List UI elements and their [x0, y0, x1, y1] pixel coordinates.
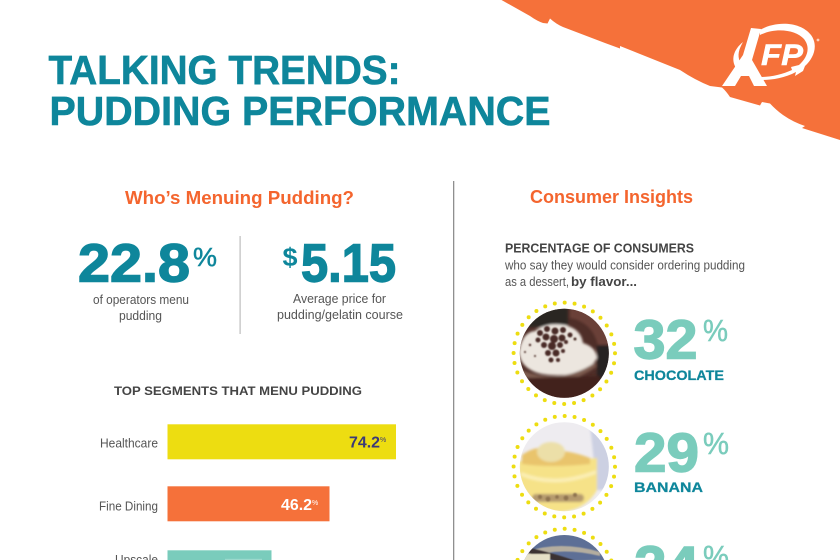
stat: average price 5.15 dollars: $ — [282, 242, 298, 272]
flavor: chocolate — [514, 303, 728, 404]
bar: fine dining — [99, 486, 330, 521]
stat: 29 percent — [634, 422, 729, 484]
bar chart: top segments — [99, 384, 396, 560]
bar: fine dining: 46.2 — [281, 497, 312, 514]
intro text block: who say they would consider ordering pudding — [504, 258, 745, 272]
AFP logo — [722, 24, 819, 86]
orange torn corner banner — [502, 0, 840, 140]
flavor: banana — [514, 416, 729, 517]
stat divider — [240, 236, 241, 334]
intro text block: as a dessert, — [505, 275, 569, 289]
stat: average price 5.15 dollars: 5.15 — [301, 234, 396, 294]
title: PUDDING PERFORMANCE — [50, 88, 550, 134]
title — [48, 47, 550, 134]
bar: healthcare — [100, 424, 396, 459]
stat: 22.8 percent of operators: % — [193, 242, 217, 272]
bar: fine dining: Fine Dining — [99, 500, 158, 514]
stat: 29 percent: 29 — [634, 422, 699, 484]
label: banana: BANANA — [634, 479, 703, 495]
column divider — [453, 181, 454, 560]
stat: 24 percent — [634, 534, 729, 560]
photo: banana pudding — [514, 416, 615, 517]
bar: healthcare: 74.2 — [349, 434, 380, 452]
stat: average price 5.15 dollars — [277, 234, 403, 322]
photo: third pudding — [514, 529, 615, 560]
stat: 32 percent: 32 — [634, 308, 698, 370]
heading: consumer insights: Consumer Insights — [530, 187, 693, 207]
stat: 22.8 percent of operators: pudding — [119, 309, 162, 323]
stat: 22.8 percent of operators: 22.8 — [78, 234, 190, 294]
stat: average price 5.15 dollars: Average price for — [293, 292, 386, 306]
panel: consumer insights — [504, 187, 745, 560]
intro text block: by flavor... — [571, 275, 637, 289]
sprinkles — [524, 326, 576, 362]
stat: 22.8 percent of operators — [78, 234, 217, 323]
title: TALKING TRENDS: — [48, 47, 400, 93]
label: chocolate: CHOCOLATE — [634, 367, 724, 383]
intro text block: PERCENTAGE OF CONSUMERS — [505, 242, 694, 256]
bar: fine dining: % — [312, 500, 318, 507]
heading: who's menuing pudding: Who’s Menuing Pudding? — [125, 188, 354, 208]
intro text block — [504, 242, 745, 289]
chart heading: TOP SEGMENTS THAT MENU PUDDING — [114, 384, 362, 398]
stat: 29 percent: % — [703, 426, 729, 461]
stat: 22.8 percent of operators: of operators menu — [93, 293, 189, 307]
stat: 32 percent: % — [703, 313, 728, 348]
bar: healthcare: Healthcare — [100, 436, 158, 450]
stat: 32 percent — [634, 308, 728, 370]
photo: chocolate pudding — [514, 303, 615, 404]
bar: upscale — [115, 550, 272, 560]
panel: who's menuing pudding — [78, 188, 403, 560]
flavor: third flavor, cut off by page edge — [514, 529, 729, 560]
bar: healthcare: % — [380, 437, 386, 444]
AFP logo: FP — [761, 39, 804, 72]
stat: average price 5.15 dollars: pudding/gelatin course — [277, 308, 403, 322]
